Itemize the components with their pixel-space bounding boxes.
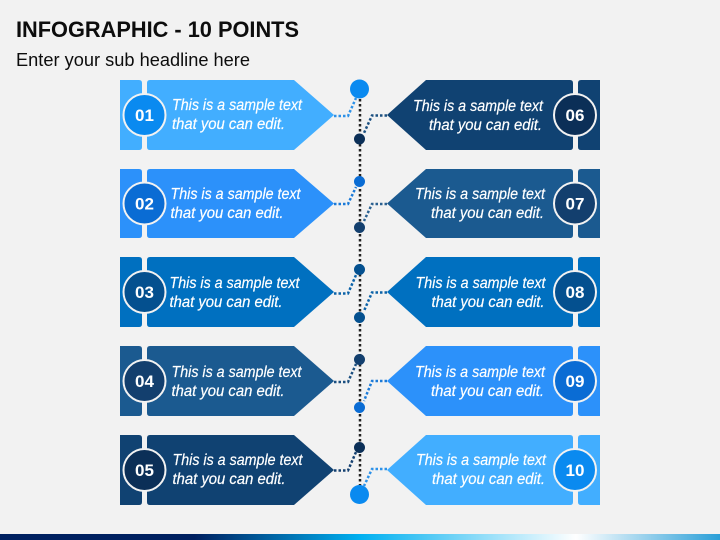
panel: point 01: 01 — [135, 106, 154, 125]
panel: point 01 — [120, 80, 334, 150]
panel: point 06: that you can edit. — [429, 117, 542, 134]
panel: point 10 — [387, 435, 600, 505]
connectors: dotted links from panels to spine — [334, 98, 387, 486]
panel: point 09: that you can edit. — [431, 383, 544, 400]
panel: point 10: that you can edit. — [432, 471, 545, 488]
panel: point 06: 06 — [566, 106, 584, 125]
panel: point 02: This is a sample text — [170, 186, 301, 203]
panel: point 07: that you can edit. — [431, 205, 544, 222]
panel: point 09 — [387, 346, 600, 416]
panel: point 08 — [387, 257, 600, 327]
panel: point 02 — [120, 169, 334, 238]
panel: point 06 — [387, 80, 600, 150]
panel: point 05: This is a sample text — [172, 452, 303, 469]
panel: point 10: This is a sample text — [416, 452, 547, 469]
panel: point 09: 09 — [566, 372, 584, 391]
panel: point 03 — [120, 257, 334, 327]
panel: point 04 — [120, 346, 334, 416]
spine nodes — [350, 80, 369, 504]
panel: point 03: that you can edit. — [170, 294, 282, 311]
panel: point 03: This is a sample text — [170, 275, 300, 292]
panel: point 05: 05 — [135, 461, 154, 480]
bottom gradient bar — [0, 534, 720, 540]
panel: point 04: This is a sample text — [172, 364, 302, 381]
panel: point 05: that you can edit. — [172, 471, 286, 488]
panel: point 04: 04 — [135, 372, 154, 391]
central dotted spine — [359, 89, 361, 495]
panel: point 10: 10 — [566, 461, 584, 480]
panel: point 08: This is a sample text — [416, 275, 546, 292]
panel: point 08: that you can edit. — [432, 294, 544, 311]
panel: point 01: This is a sample text — [172, 97, 303, 114]
panel: point 09: This is a sample text — [415, 364, 546, 381]
panel: point 02: 02 — [135, 194, 154, 214]
panel: point 06: This is a sample text — [413, 98, 544, 115]
panel: point 07: 07 — [566, 194, 584, 214]
panel: point 08: 08 — [566, 283, 584, 302]
panel: point 07: This is a sample text — [415, 186, 546, 203]
sub headline: Enter your sub headline here — [16, 50, 250, 70]
panel: point 01: that you can edit. — [172, 116, 285, 133]
panel: point 04: that you can edit. — [172, 383, 284, 400]
panel: point 02: that you can edit. — [170, 205, 284, 222]
panel: point 03: 03 — [135, 283, 154, 302]
title: INFOGRAPHIC - 10 POINTS — [16, 17, 299, 42]
panel: point 05 — [120, 435, 334, 505]
panel: point 07 — [387, 169, 600, 238]
